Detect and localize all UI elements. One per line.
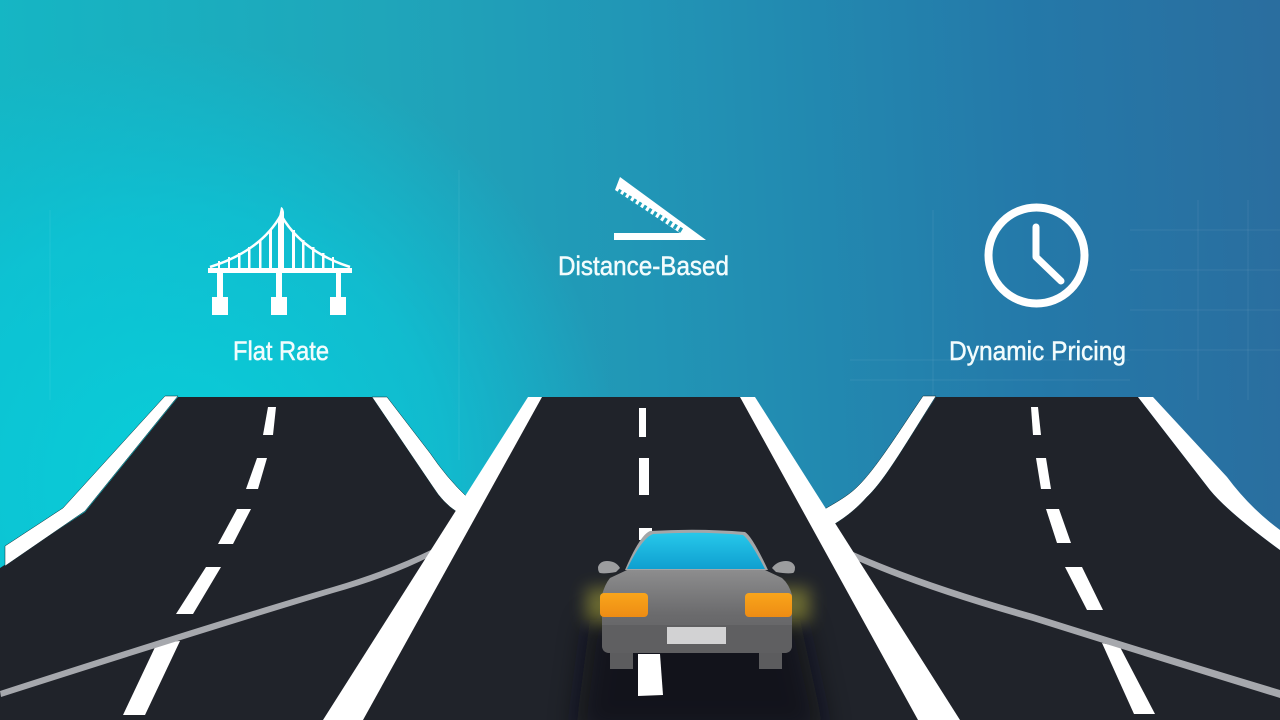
windshield	[627, 533, 765, 569]
road edge lines: flat rate	[5, 396, 467, 566]
lane dashes: distance-based	[639, 408, 652, 540]
headlights	[600, 593, 792, 617]
panel: distance-based road	[323, 397, 960, 720]
road surface: dynamic pricing	[780, 397, 1280, 720]
car	[575, 530, 825, 720]
headlight glow	[586, 588, 810, 622]
grey crossing line: dynamic pricing	[851, 551, 1280, 698]
lane dashes: dynamic pricing	[1031, 407, 1155, 714]
car shadow	[575, 620, 825, 720]
road edge lines: distance-based	[323, 397, 960, 720]
icon: bridge	[208, 207, 352, 315]
car body	[602, 570, 792, 653]
windshield frame	[625, 530, 768, 570]
mirrors	[598, 561, 795, 573]
bumper	[602, 625, 792, 653]
road surface: distance-based	[323, 397, 960, 720]
icon: ruler	[614, 177, 706, 240]
grey crossing line: flat rate	[0, 549, 433, 697]
road surface: flat rate	[0, 397, 520, 720]
lane dashes: flat rate	[123, 407, 276, 715]
label: flat rate: Flat Rate	[233, 336, 329, 366]
column: flat rate	[208, 207, 352, 366]
column: distance-based	[558, 177, 729, 281]
label: dynamic pricing: Dynamic Pricing	[949, 336, 1126, 366]
lower dash under car	[638, 654, 663, 696]
label: distance-based: Distance-Based	[558, 251, 729, 281]
panel: dynamic pricing road	[780, 396, 1280, 720]
license plate	[667, 627, 726, 644]
wheels	[610, 645, 782, 669]
column: dynamic pricing	[949, 208, 1126, 366]
icon: clock	[988, 208, 1084, 304]
panel: flat rate road	[0, 396, 520, 720]
road edge lines: dynamic pricing	[823, 396, 1280, 550]
